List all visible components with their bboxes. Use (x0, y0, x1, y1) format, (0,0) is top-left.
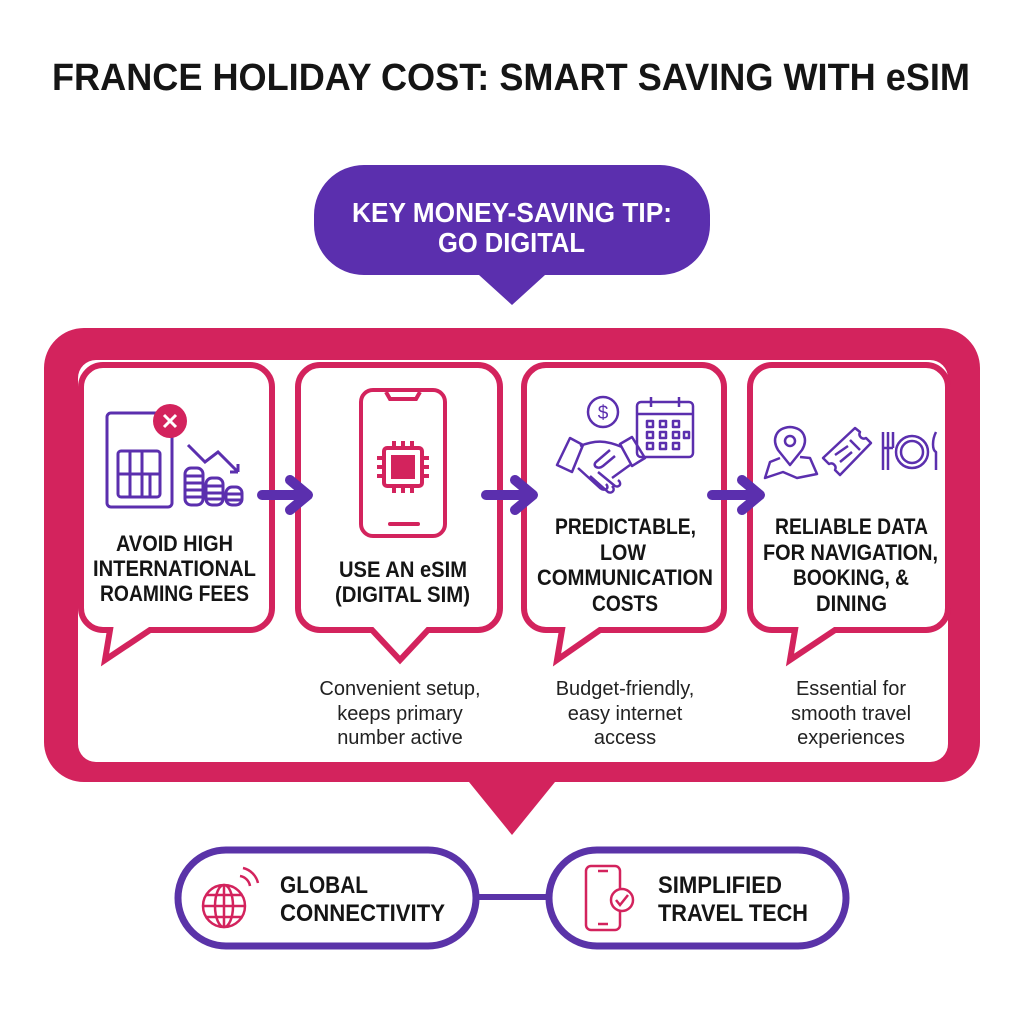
card 3: predictable costs (524, 365, 724, 660)
icon: dollar, handshake, calendar (557, 397, 693, 493)
text: card 2 heading: USE AN eSIM (339, 557, 467, 582)
connector line (475, 894, 550, 900)
pill: simplified travel tech: TRAVEL TECH (658, 900, 808, 927)
card 1: avoid roaming fees (81, 365, 272, 660)
icon: phone with chip (361, 390, 445, 536)
icon: sim card with x and coins (107, 413, 242, 507)
pill: global connectivity: CONNECTIVITY (280, 900, 445, 927)
pill: global connectivity (178, 850, 476, 946)
text: card 3 heading (537, 514, 713, 616)
text: card 2 heading (335, 557, 470, 607)
text: card 1 heading: INTERNATIONAL (93, 556, 256, 581)
text: card 3 heading: LOW (600, 540, 646, 565)
text: esim detail: number active (337, 727, 463, 749)
arrow 3 (712, 480, 760, 510)
arrow 2 (486, 480, 533, 510)
text: data detail (791, 678, 911, 749)
text: data detail: smooth travel (791, 703, 911, 725)
text: cost detail (556, 678, 694, 749)
text: data detail: experiences (797, 727, 905, 749)
text: card 3 heading: COMMUNICATION (537, 565, 713, 590)
title: FRANCE HOLIDAY COST: SMART SAVING WITH eSIM (52, 57, 970, 99)
text: esim detail: Convenient setup, (319, 678, 481, 700)
text: card 1 heading: ROAMING FEES (100, 581, 249, 606)
card 4: reliable data (750, 365, 948, 660)
icon: map pin, ticket, dining (765, 427, 936, 478)
pill: simplified travel tech: SIMPLIFIED (658, 872, 782, 899)
text: card 4 heading: DINING (816, 591, 887, 616)
text: card 4 heading: RELIABLE DATA (775, 514, 928, 539)
text: card 4 heading: FOR NAVIGATION, (763, 540, 938, 565)
text: card 1 heading: AVOID HIGH (116, 531, 233, 556)
text: esim detail: keeps primary (337, 703, 463, 725)
text: card 4 heading (763, 514, 938, 616)
icon: dollar, handshake, calendar: $ (598, 403, 609, 424)
text: esim detail (319, 678, 481, 749)
callout: key tip bubble: KEY MONEY-SAVING TIP: (352, 197, 672, 228)
text: card 4 heading: BOOKING, & (793, 565, 909, 590)
icon: globe (203, 868, 258, 927)
text: card 1 heading (93, 531, 256, 606)
callout: key tip bubble (314, 165, 710, 305)
icon: phone with check (586, 866, 633, 930)
text: data detail: Essential for (796, 678, 906, 700)
arrow 1 (262, 480, 308, 510)
panel: main frame (44, 328, 980, 835)
pill: global connectivity: GLOBAL (280, 872, 368, 899)
card 2: use an esim (298, 365, 500, 660)
text: cost detail: Budget-friendly, (556, 678, 694, 700)
text: cost detail: easy internet (568, 703, 683, 725)
text: card 3 heading: COSTS (592, 591, 658, 616)
text: card 3 heading: PREDICTABLE, (555, 514, 696, 539)
text: card 2 heading: (DIGITAL SIM) (335, 582, 470, 607)
pill: simplified travel tech (549, 850, 846, 946)
text: cost detail: access (594, 727, 656, 749)
callout: key tip bubble: GO DIGITAL (438, 227, 585, 258)
